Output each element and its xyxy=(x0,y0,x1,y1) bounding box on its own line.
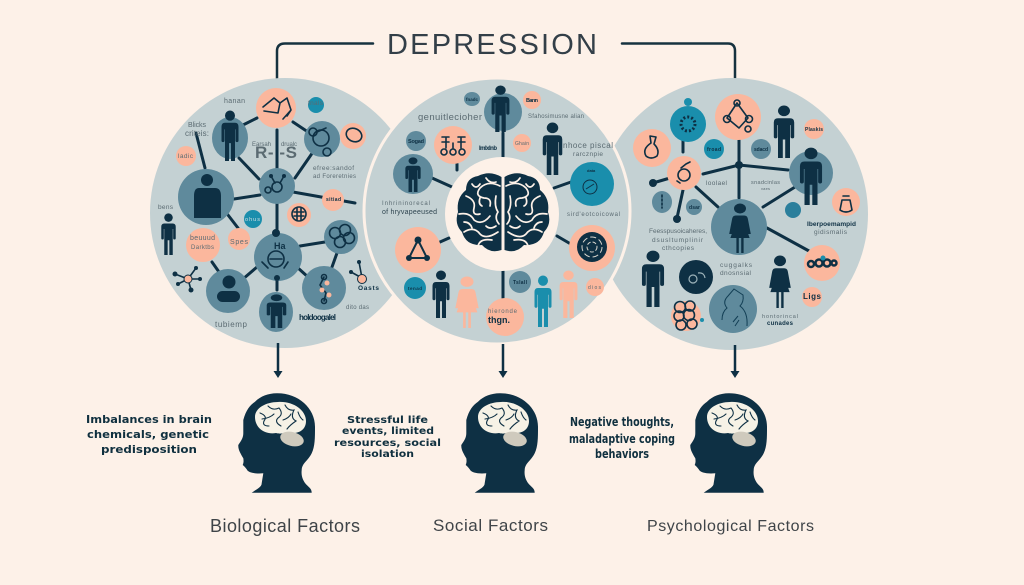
small labels top xyxy=(406,91,541,152)
social labels: sird'eotcoicowal xyxy=(567,212,620,218)
small discs xyxy=(652,139,801,218)
icon: head with brain psychological xyxy=(690,393,767,493)
node: peach bottom: thgn. xyxy=(488,315,510,325)
social labels xyxy=(382,112,620,218)
text: biological description: chemicals, genetic xyxy=(87,428,209,441)
blue labels: ohus xyxy=(245,217,260,223)
icon: head with brain biological xyxy=(238,393,315,493)
small discs: dsar xyxy=(689,205,700,211)
node: peach people chain xyxy=(434,126,472,164)
psychological labels: vaes xyxy=(761,186,770,191)
small discs bottom: dios xyxy=(588,285,602,291)
node: large woman xyxy=(711,199,767,255)
peach label: plaskis: Plaskis xyxy=(805,127,823,133)
social labels: nhoce piscal xyxy=(563,141,613,150)
node: peach bottom: hieronde xyxy=(488,309,518,315)
icon: network right xyxy=(349,260,366,284)
biological labels: drualc xyxy=(281,142,297,148)
text: psychological description: maladaptive coping xyxy=(569,431,675,446)
psychological labels xyxy=(649,180,856,327)
node: blue virus xyxy=(670,98,706,142)
node: jar xyxy=(832,188,860,216)
small labels top: Bann xyxy=(526,98,539,104)
arrow: biological xyxy=(274,343,282,378)
biological labels: bens xyxy=(158,204,174,211)
biological labels: holdoogalel xyxy=(299,313,336,322)
text: psychological description: Negative thoughts, xyxy=(570,414,674,429)
peach labels xyxy=(176,123,366,262)
psychological labels: gidismalis xyxy=(814,229,848,236)
biological labels: dito das xyxy=(346,305,369,311)
small discs bottom xyxy=(404,271,604,299)
text: social description: events, limited xyxy=(342,426,434,437)
spoke lines xyxy=(432,133,571,298)
text: social description: resources, social xyxy=(334,438,441,449)
node: blue disc: data xyxy=(587,168,596,173)
peach label: ligs xyxy=(802,287,822,307)
small labels top: Sogad xyxy=(408,139,424,145)
biological labels: Earsah xyxy=(252,142,271,148)
node: person face xyxy=(206,269,250,313)
node: dark spiral xyxy=(569,225,615,271)
title: DEPRESSION xyxy=(387,29,597,61)
biological labels: tubiemp xyxy=(215,320,248,329)
psychological labels: snadcinlas xyxy=(751,180,780,186)
biological labels: Oasts xyxy=(358,285,379,292)
node: bottom person xyxy=(259,275,293,332)
node: dark disc xyxy=(679,260,713,294)
psychological labels: Feesspusoicaheres, xyxy=(649,228,707,235)
node: person xyxy=(212,111,248,161)
panel: psychological circle xyxy=(596,78,868,350)
bracket connector: left xyxy=(277,44,373,83)
peach labels: beuuud xyxy=(190,235,215,242)
social labels: of hryvapeeused xyxy=(382,209,437,216)
icon: network left xyxy=(172,266,202,292)
peach label: ligs: Ligs xyxy=(803,292,822,301)
social labels: Inhrininorecal xyxy=(382,201,430,207)
person left xyxy=(642,251,664,307)
standalone person xyxy=(161,213,176,255)
biological labels: criteis: xyxy=(185,129,209,138)
psychological labels: dnosnsial xyxy=(720,270,752,277)
network connector lines xyxy=(653,140,809,251)
social labels: genuitlecioher xyxy=(418,112,482,123)
psychological labels: hontorincal xyxy=(762,314,798,320)
people row xyxy=(432,270,577,328)
network connector lines xyxy=(196,118,355,290)
text: social description: isolation xyxy=(361,449,414,460)
center brain xyxy=(445,157,559,271)
standalone person xyxy=(543,123,562,175)
node: dna xyxy=(302,266,346,310)
biological labels: ad Foreretnies xyxy=(313,174,356,180)
woman right xyxy=(769,256,791,308)
social labels: Sfahosimusne alian xyxy=(528,114,584,120)
psychological labels: cthcopies xyxy=(662,245,695,252)
social labels: Imlxlnb xyxy=(479,146,497,152)
node: large person xyxy=(178,169,234,225)
psychological labels: loolael xyxy=(706,180,728,187)
node: peach bag xyxy=(667,156,701,190)
text: social description: Stressful life xyxy=(347,415,428,426)
biological labels: efree:sandof xyxy=(313,165,354,172)
node: triangle xyxy=(395,227,441,273)
text: biological description: predisposition xyxy=(101,443,197,456)
psychological labels: dsusltumplinir xyxy=(652,237,704,244)
text: social description xyxy=(334,415,441,460)
social labels: rarcznpie xyxy=(573,151,603,158)
small labels top: Ghain xyxy=(515,141,529,147)
panel: biological circle xyxy=(150,78,420,348)
heading: biological factors: Biological Factors xyxy=(210,516,360,536)
small discs: froad xyxy=(707,147,721,153)
standalone person xyxy=(774,106,794,158)
node: bottom central: Ha xyxy=(274,241,286,251)
peach label: plaskis xyxy=(804,119,824,139)
connector dots xyxy=(649,161,743,223)
node: cells xyxy=(324,220,358,254)
blue labels: fnals xyxy=(308,100,324,107)
node: cell cluster xyxy=(671,301,704,331)
node: bottom central xyxy=(254,229,302,281)
node: large person xyxy=(789,148,833,205)
node: circle network xyxy=(304,121,340,157)
psychological labels: Iberpoemampid xyxy=(807,221,856,228)
text: biological description: Imbalances in brain xyxy=(86,413,212,426)
node: head profile xyxy=(709,285,757,333)
heading: social factors: Social Factors xyxy=(433,516,548,535)
arrow: psychological xyxy=(730,345,740,378)
small labels top: fnadc xyxy=(466,97,478,102)
node: central network xyxy=(259,168,295,204)
node: peach bottom xyxy=(486,298,524,336)
node: person xyxy=(393,154,433,194)
small discs bottom: tenad xyxy=(408,286,422,291)
biological labels xyxy=(158,98,379,329)
biological labels: hanan xyxy=(224,98,245,105)
node: top person xyxy=(484,85,522,132)
node: peach dots chain xyxy=(804,245,840,281)
heading: psychological factors: Psychological Factors xyxy=(647,518,814,535)
node: blue disc xyxy=(570,162,614,206)
small discs: sdacd xyxy=(754,147,768,153)
panel: social circle xyxy=(364,78,630,344)
peach labels: Spes xyxy=(230,239,248,246)
bracket connector: right xyxy=(622,44,735,83)
psychological labels: cuggalks xyxy=(720,262,753,269)
peach labels: sitiad xyxy=(326,197,341,203)
blue labels xyxy=(244,97,324,228)
text: biological description xyxy=(86,413,212,456)
biological labels: R- -S xyxy=(255,143,297,162)
icon: head with brain social xyxy=(461,393,538,493)
node: flask xyxy=(633,129,671,167)
node: molecule xyxy=(256,88,296,128)
biological labels: Blicks xyxy=(188,122,206,129)
arrow: social xyxy=(498,344,508,378)
small discs bottom: Tslall xyxy=(513,280,528,286)
text: psychological description xyxy=(569,414,675,461)
peach labels: ladic xyxy=(178,153,194,160)
text: psychological description: behaviors xyxy=(595,446,649,461)
psychological labels: cunades xyxy=(767,321,794,327)
node: triangle network xyxy=(715,94,761,140)
peach labels: Darktbs xyxy=(191,245,214,251)
